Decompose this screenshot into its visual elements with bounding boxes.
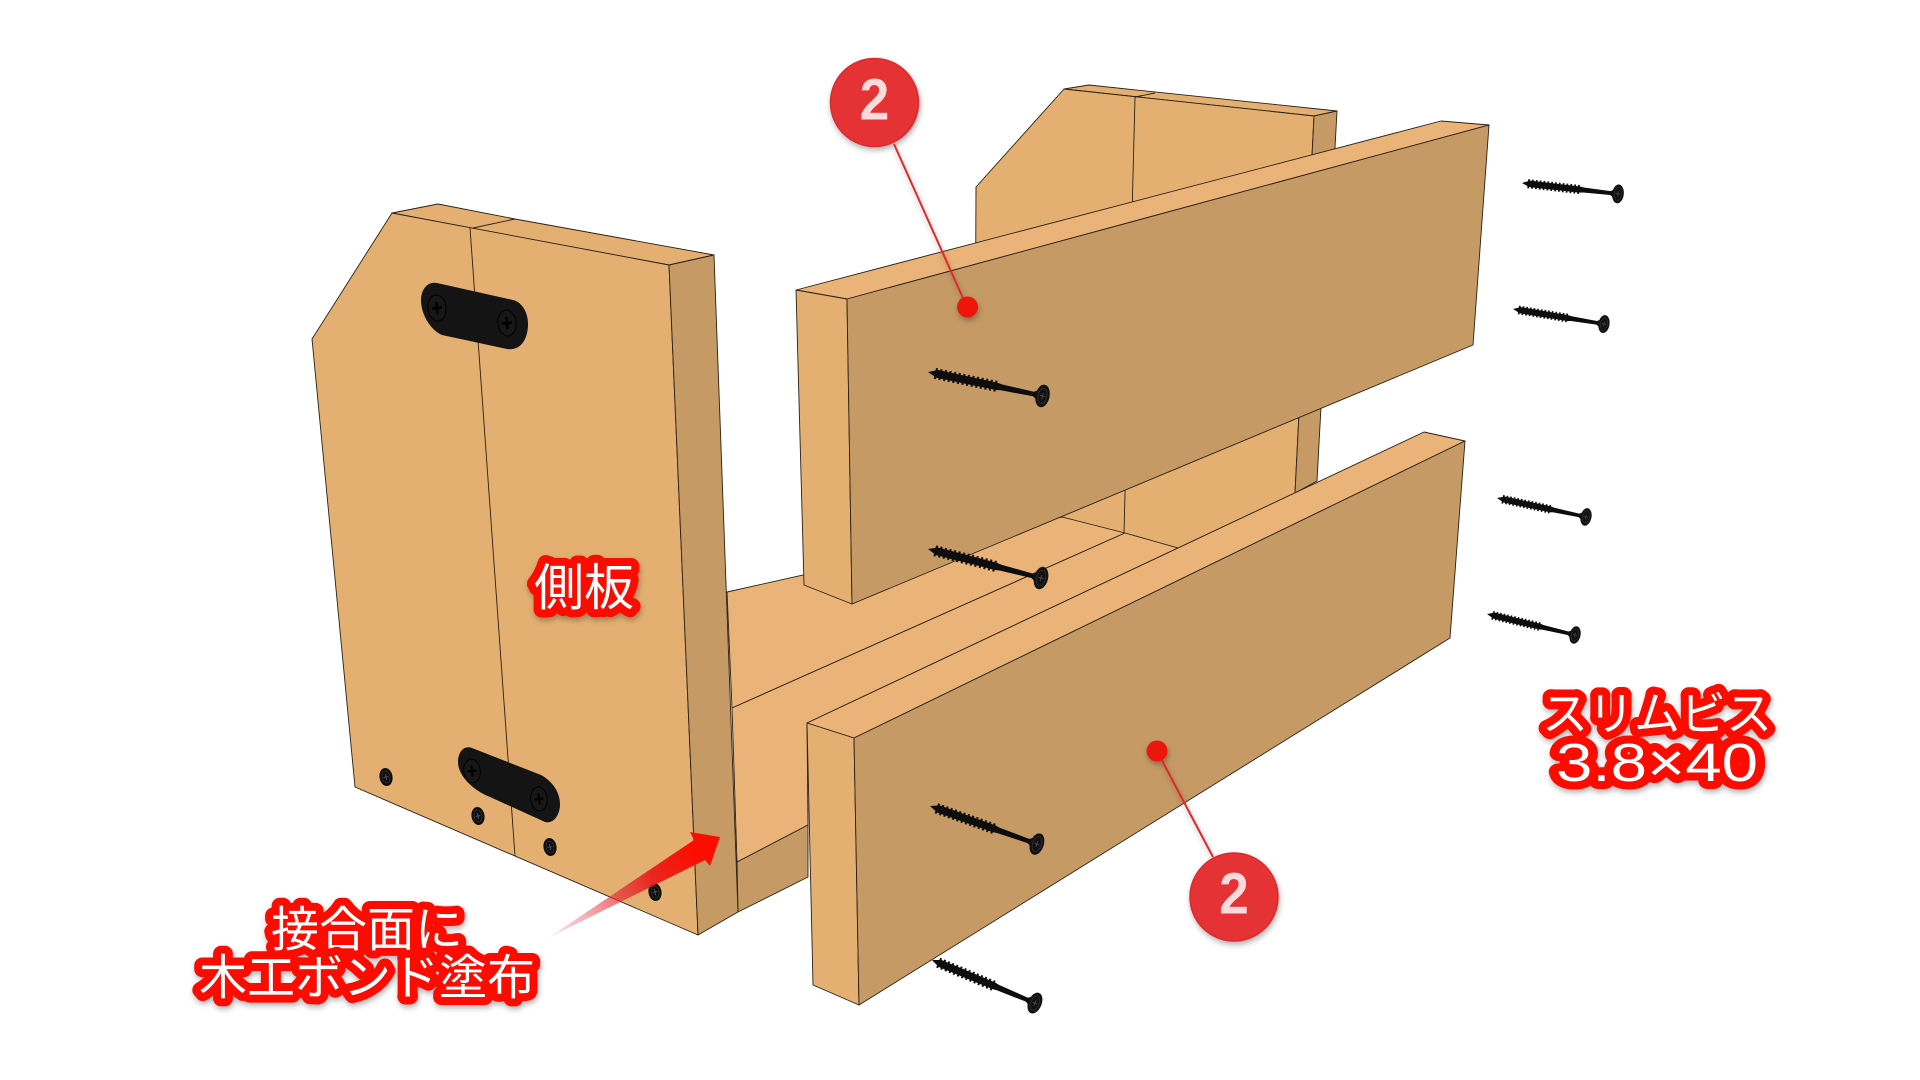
- label: glue note: 接合面に: [271, 904, 463, 957]
- screw 7: [1495, 489, 1593, 527]
- screw 5: [1521, 174, 1625, 204]
- label: glue note: 木工ボンド塗布: [199, 952, 535, 1005]
- label: slim screw spec: スリムビス: [1542, 688, 1772, 740]
- label: glue note: [199, 904, 535, 1005]
- callout: number 2 upper board: [830, 58, 978, 318]
- label: slim screw spec: [1542, 688, 1772, 793]
- metal plate: bottom: [458, 747, 560, 822]
- screw 3: [926, 796, 1047, 857]
- callout: number 2 upper board: 2: [860, 67, 889, 132]
- label: slim screw spec: 3.8×40: [1556, 733, 1758, 793]
- screw 1: [926, 361, 1052, 409]
- upper front board: [796, 121, 1489, 604]
- screw heads in panel: [378, 767, 663, 902]
- arrow: glue point: [548, 832, 720, 938]
- screw 2: [925, 538, 1051, 591]
- metal plate: top: [421, 283, 528, 349]
- screw 6: [1512, 300, 1611, 334]
- screw 4: [928, 950, 1045, 1016]
- callout: number 2 lower board: 2: [1219, 861, 1249, 926]
- lower front board: [807, 432, 1465, 1005]
- left side panel: [312, 204, 738, 935]
- callout: number 2 lower board: [1146, 740, 1278, 941]
- floor board: [727, 517, 1178, 912]
- screw 8: [1485, 605, 1582, 645]
- back side panel: [975, 85, 1337, 548]
- label: side panel: 側板: [534, 560, 634, 616]
